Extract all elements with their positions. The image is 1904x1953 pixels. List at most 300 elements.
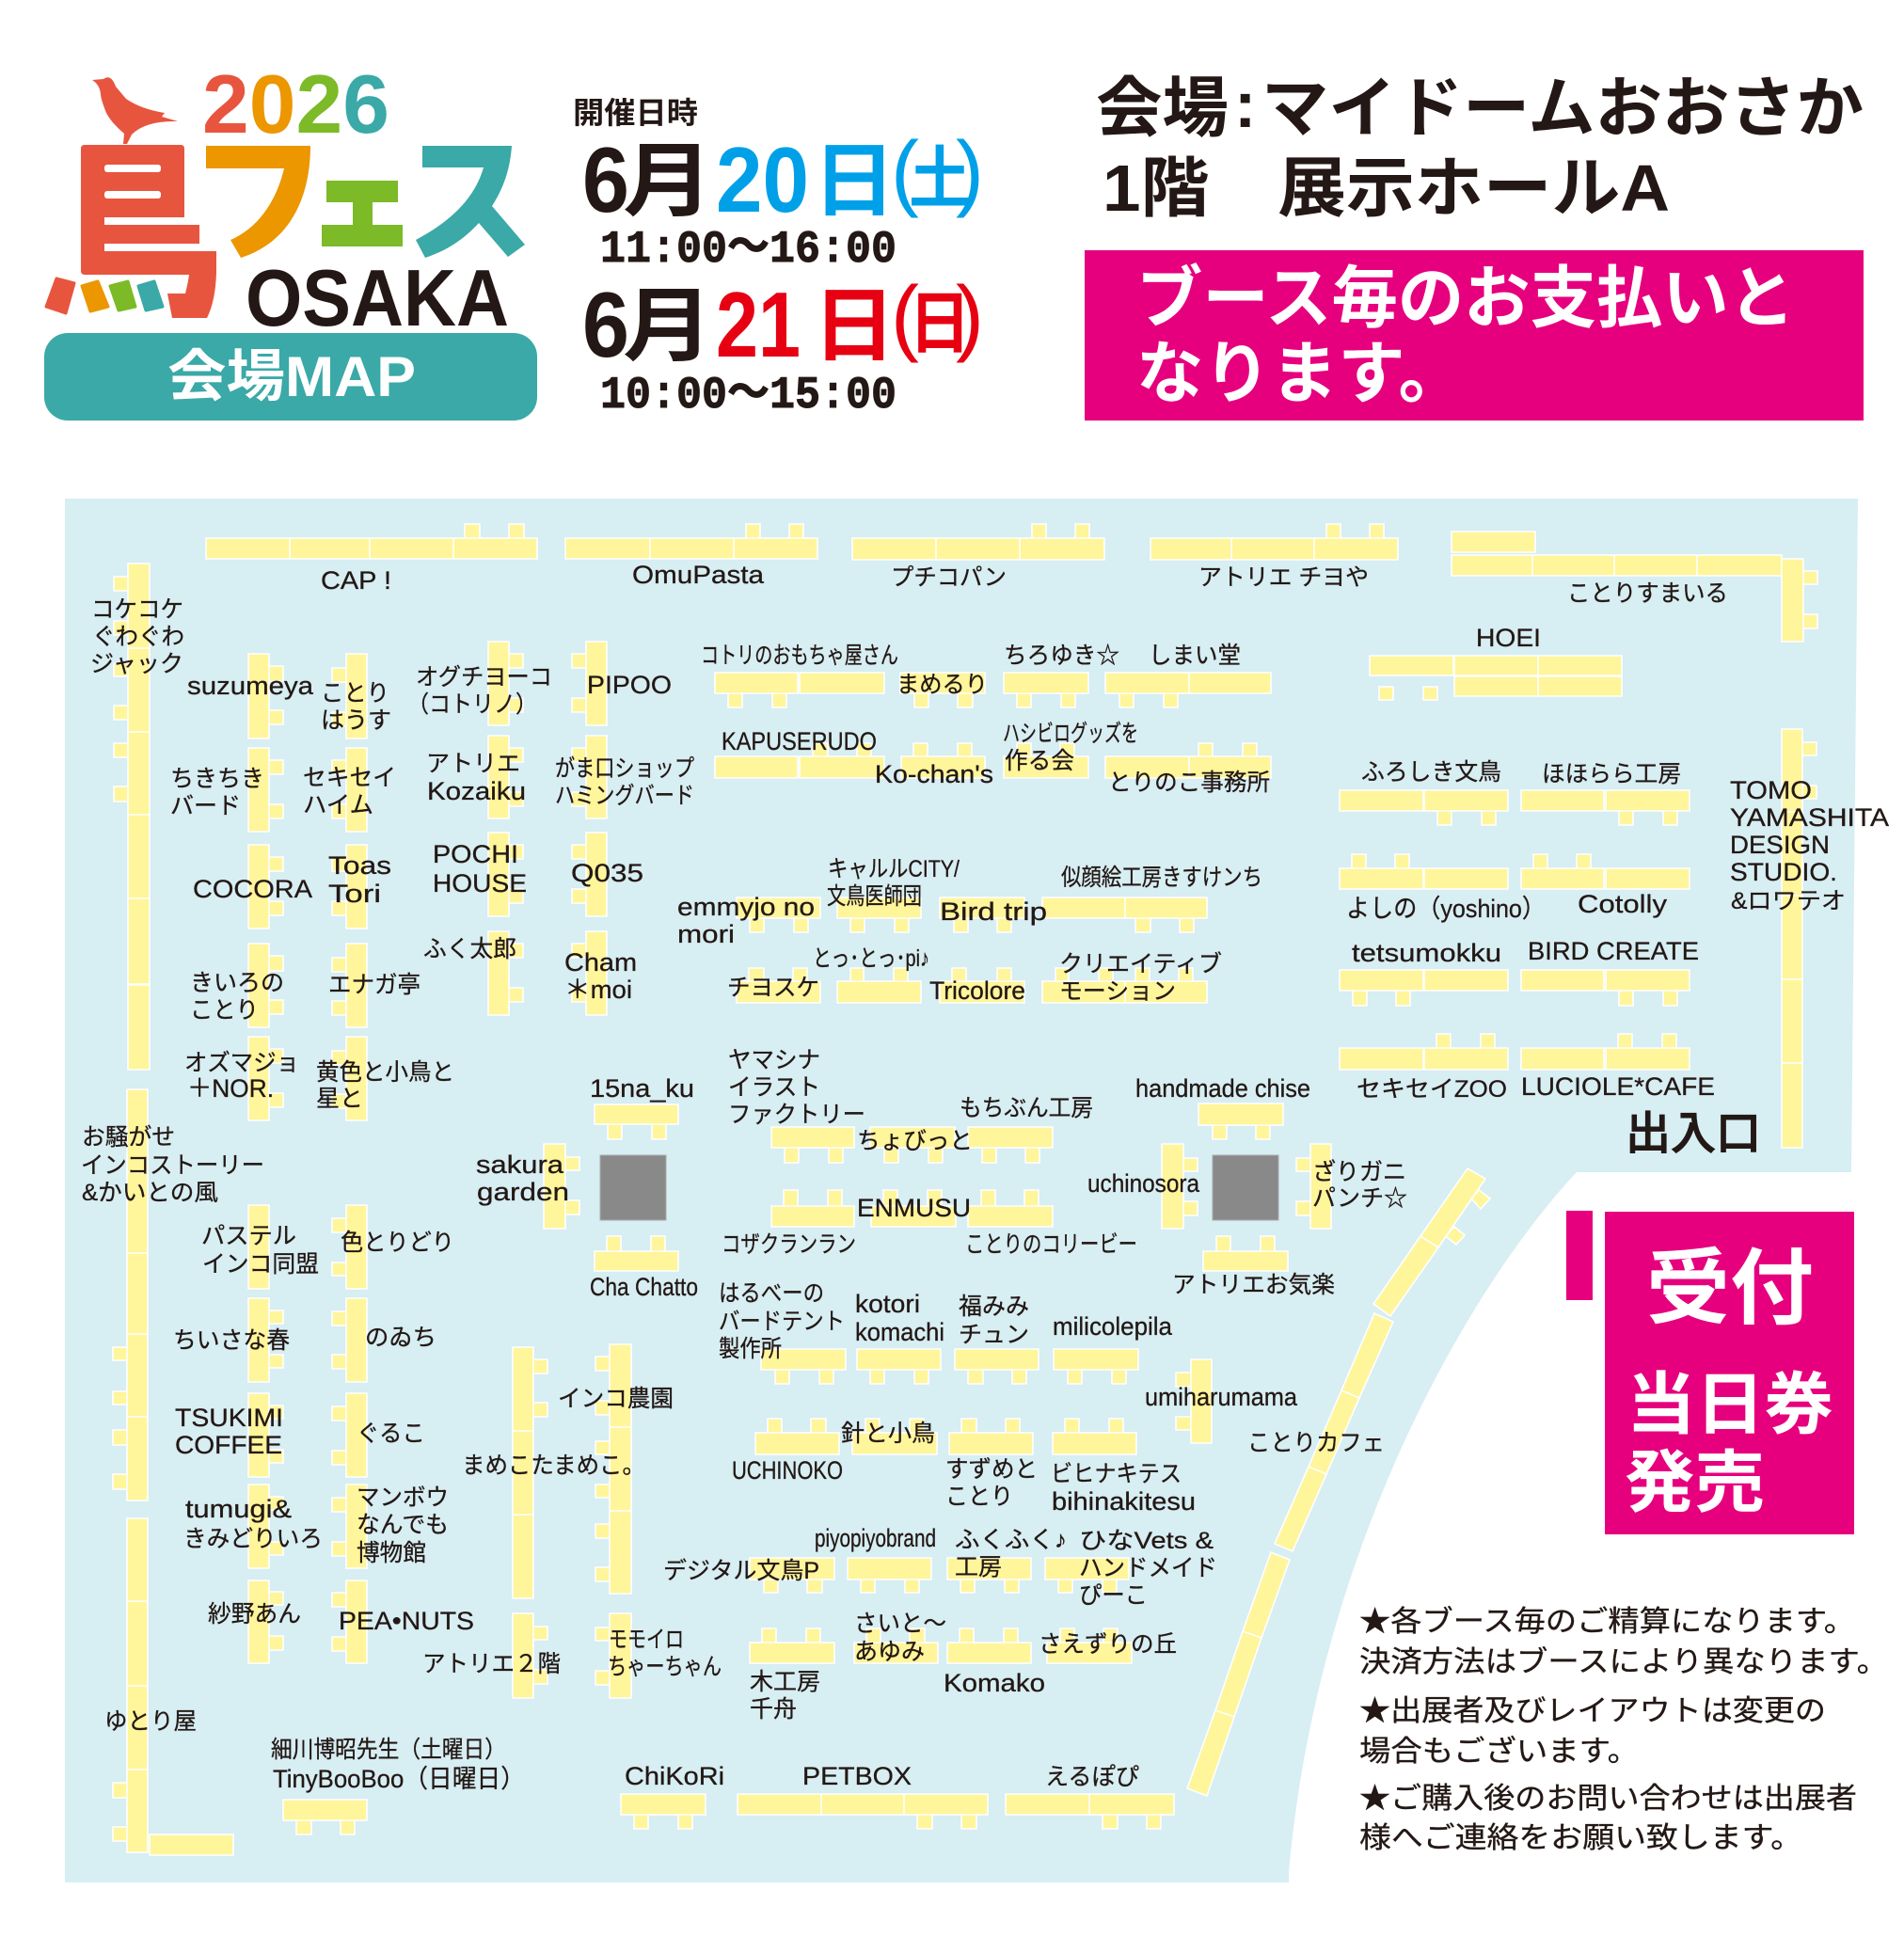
booth: クリエイティブモーション (1042, 968, 1207, 1003)
label: はるべーのバードテント製作所: はるべーの (719, 1280, 824, 1307)
label: オグチヨーコ(コトリノ): （コトリノ） (407, 691, 537, 718)
label: オズマジョ+NOR.: オズマジョ (184, 1050, 299, 1076)
label: handmade chise: handmade chise (1135, 1074, 1310, 1103)
label: コトリのおもちゃ屋さん: コトリのおもちゃ屋さん (701, 643, 898, 669)
booth: Q035 (572, 833, 607, 916)
label: 福みみチュン: 福みみ (959, 1294, 1029, 1320)
label: 黄色と小鳥と星と (316, 1059, 454, 1112)
label: パステルインコ同盟: パステル (201, 1223, 296, 1249)
booth: ハシビログッズを作る会 (1004, 743, 1088, 778)
booth: Cha Chatto (595, 1236, 678, 1271)
booth: コザクランラン (771, 1190, 854, 1227)
label: アトリエお気楽: アトリエお気楽 (1172, 1272, 1335, 1298)
label: emmyjo no mori: mori (677, 920, 735, 948)
banner: 会場MAP (44, 333, 537, 421)
label: マンボウなんでも博物館 (357, 1485, 449, 1566)
panel: venue floor (65, 499, 1858, 1882)
label: POCHI HOUSE (433, 840, 527, 897)
label: クリエイティブモーション: モーション (1059, 978, 1176, 1005)
label: 15na_ku: 15na_ku (590, 1074, 694, 1103)
date: 6月21日(日): ( (891, 270, 919, 364)
label: Q035: Q035 (571, 859, 643, 887)
booth: 細川博昭先生 (283, 1800, 367, 1834)
booth labels (81, 561, 1889, 1793)
label: 木工房千舟 (750, 1669, 820, 1723)
label: ビヒナキテス bihinakitesu (1051, 1461, 1196, 1516)
label: オグチヨーコ(コトリノ): オグチヨーコ (416, 664, 552, 691)
booth: アトリエ チヨや (1150, 524, 1398, 560)
booth: ことりカフェ diagonal wall (1187, 1168, 1490, 1796)
booth: モモイロちゃーちゃん (595, 1613, 631, 1698)
booth: 15na_ku (595, 1104, 678, 1139)
booth: ことりのコリービー (968, 1190, 1053, 1227)
booth: ぐるこ (332, 1393, 367, 1477)
time: Sunday: 10:00〜15:00 (600, 371, 896, 421)
booth: とりのこ事務所 (1105, 743, 1271, 778)
label: しまい堂: しまい堂 (1149, 643, 1241, 669)
booth: 色とりどり (332, 1205, 367, 1289)
booth: ちきちきバード (248, 748, 283, 832)
booth: Ko-chan's (901, 743, 985, 778)
label: 黄色と小鳥と星と: 黄色と小鳥と (316, 1059, 454, 1086)
booth: LUCIOLE*CAFE (1521, 1034, 1690, 1070)
booth: HOEI (1370, 656, 1622, 700)
label: はるべーのバードテント製作所 (719, 1280, 845, 1362)
label: TOMO YAMASHITA DESIGN STUDIO. &ロワテオ: YAMASHITA (1730, 803, 1889, 832)
label: モモイロちゃーちゃん: モモイロ (609, 1627, 684, 1653)
booth: ChiKoRi (621, 1794, 706, 1829)
label: コケコケ ぐわぐわ ジャック: ぐわぐわ (92, 624, 184, 650)
booth: すずめとことり (949, 1419, 1033, 1454)
venue heading: : (1234, 68, 1256, 141)
booth: 福みみチュン (955, 1349, 1039, 1384)
booth: もちぶん工房 (968, 1127, 1053, 1163)
label: ENMUSU: ENMUSU (857, 1194, 971, 1222)
venue heading (1096, 68, 1864, 225)
label: ふくふく♪工房: 工房 (955, 1554, 1002, 1580)
date: 6月21日(日): 日 (813, 281, 896, 372)
notes text block (1359, 1605, 1888, 1854)
label: piyopiyobrand: piyopiyobrand (815, 1524, 936, 1552)
date: 6月21日(日): 6 (582, 273, 629, 376)
icon: bird (92, 77, 178, 144)
label: milicolepila: milicolepila (1053, 1312, 1173, 1341)
booth: PEA•NUTS (332, 1580, 367, 1663)
label: 細川博昭先生 TinyBooBoo: TinyBooBoo（日曜日） (273, 1765, 525, 1793)
booth: tetsumokku (1340, 970, 1508, 1006)
date: 6月21日(日): 月 (623, 281, 713, 372)
label: キャルルCITY/文鳥医師団 (827, 856, 960, 910)
label: Cotolly: Cotolly (1578, 890, 1668, 918)
label: 木工房千舟: 千舟 (750, 1696, 797, 1723)
booth: BIRD CREATE (1521, 970, 1690, 1006)
label: きいろのことり: ことり (190, 997, 259, 1024)
label: kotori komachi: kotori (855, 1290, 920, 1318)
booth: milicolepila (1054, 1349, 1138, 1384)
label: TOMO YAMASHITA DESIGN STUDIO. &ロワテオ: TOMO (1730, 776, 1812, 804)
label: キャルルCITY/文鳥医師団: 文鳥医師団 (827, 883, 922, 910)
booth: uchinosora (1162, 1144, 1198, 1229)
label: はるべーのバードテント製作所: 製作所 (719, 1336, 782, 1362)
label: セキセイハイム: セキセイ (303, 765, 396, 791)
booth: CAP ! (206, 524, 537, 559)
notes text block: 様へご連絡をお願い致します。 (1359, 1821, 1802, 1854)
label: マンボウなんでも博物館: 博物館 (357, 1540, 426, 1566)
label: コケコケ ぐわぐわ ジャック: コケコケ (91, 596, 183, 623)
booth: ざりガニパンチ☆ (1296, 1144, 1331, 1229)
label: tumugi& きみどりいろ: tumugi& (185, 1495, 292, 1523)
booth: オズマジョ+NOR. (248, 1037, 283, 1120)
label: デジタル文鳥P: デジタル文鳥P (663, 1558, 819, 1584)
booth: チヨスケ (737, 968, 820, 1003)
booth: handmade chise (1198, 1104, 1283, 1139)
label: がま口ショップ ハミングバード: がま口ショップ (555, 755, 694, 782)
label: emmyjo no mori (677, 893, 815, 948)
label: ふくふく♪工房: ふくふく♪ (955, 1527, 1067, 1553)
venue heading: マイドームおおさか (1261, 71, 1864, 145)
label: 細川博昭先生 TinyBooBoo: 細川博昭先生（土曜日） (271, 1737, 506, 1763)
label: tetsumokku: tetsumokku (1352, 939, 1501, 967)
booth: ことりはうす (332, 654, 367, 738)
booth: 針と小鳥 (852, 1419, 937, 1454)
venue heading: 会場 (1096, 71, 1229, 145)
label: コケコケ ぐわぐわ ジャック (90, 596, 184, 677)
booth: POCHI HOUSE (488, 833, 523, 916)
label: ふくふく♪工房 (955, 1527, 1067, 1580)
label: クリエイティブモーション: クリエイティブ (1059, 951, 1222, 977)
booth: コトリのおもちゃ屋さん (715, 673, 884, 707)
label: ちいさな春: ちいさな春 (173, 1327, 290, 1354)
label: tumugi& きみどりいろ: きみどりいろ (183, 1526, 323, 1552)
label: すずめとことり: ことり (945, 1484, 1013, 1510)
booth: 紗野あん (248, 1580, 283, 1663)
label: Toas Tori: Tori (328, 880, 381, 908)
label: 似顔絵工房きすけンち: 似顔絵工房きすけンち (1061, 865, 1262, 891)
label: HOEI: HOEI (1476, 624, 1541, 652)
label: sakura garden: sakura (476, 1151, 564, 1179)
booth: suzumeya (248, 654, 283, 738)
label: ヤマシナイラストファクトリー: ヤマシナ (728, 1047, 820, 1073)
label: Cham ＊moi (564, 948, 637, 1004)
booth: sakura garden (544, 1144, 579, 1229)
date: 6月20日(土): 月 (623, 136, 713, 227)
label: セキセイハイム: ハイム (303, 792, 373, 818)
label: お騒がせインコストーリー&かいとの風: &かいとの風 (82, 1180, 218, 1206)
label: CAP !: CAP ! (321, 566, 391, 595)
label: TSUKIMI COFFEE: TSUKIMI (175, 1404, 283, 1432)
label: アトリエ2階: アトリエ２階 (422, 1651, 561, 1677)
booth: まめこたまめこ。 (513, 1347, 547, 1598)
notes text block: ★出展者及びレイアウトは変更の (1359, 1694, 1826, 1727)
booth: TSUKIMI COFFEE (248, 1393, 283, 1477)
label: PIPOO: PIPOO (587, 671, 672, 699)
label: ことりはうす: はうす (321, 707, 391, 734)
label: Cham ＊moi: Cham (564, 948, 637, 976)
booth: ENMUSU (871, 1190, 956, 1227)
label: まめるり: まめるり (896, 672, 988, 698)
booth: インコ農園 (595, 1344, 631, 1594)
booth: PETBOX (738, 1794, 988, 1829)
booth: マンボウなんでも博物館 (332, 1485, 367, 1568)
label: BIRD CREATE: BIRD CREATE (1528, 937, 1699, 965)
booth: 黄色と小鳥と星と (332, 1037, 367, 1120)
label: きいろのことり (190, 970, 284, 1024)
label: COCORA: COCORA (193, 875, 312, 903)
label: TOMO YAMASHITA DESIGN STUDIO. &ロワテオ: DESIGN (1730, 831, 1830, 859)
booth: Cotolly (1521, 854, 1690, 889)
label: 黄色と小鳥と星と: 星と (316, 1086, 363, 1112)
label: アトリエKozaiku: Kozaiku (427, 777, 526, 805)
label: きいろのことり: きいろの (190, 970, 284, 996)
label: ヤマシナイラストファクトリー: ファクトリー (728, 1102, 865, 1128)
label: sakura garden (476, 1151, 569, 1206)
booth: OmuPasta (565, 524, 817, 559)
label: ひなVets&ハンドメイドぴーこ (1079, 1528, 1217, 1609)
logo: 鳥フェス OSAKA 2026 (44, 57, 537, 421)
label: マンボウなんでも博物館: マンボウ (357, 1485, 449, 1511)
label: お騒がせインコストーリー&かいとの風: お騒がせ (82, 1124, 175, 1151)
label: ひなVets&ハンドメイドぴーこ: ひなVets & (1079, 1528, 1214, 1554)
label: KAPUSERUDO: KAPUSERUDO (722, 727, 877, 755)
payment notice panel (1085, 250, 1864, 421)
label: ビヒナキテス bihinakitesu: bihinakitesu (1052, 1487, 1196, 1516)
label: tumugi& きみどりいろ (183, 1495, 323, 1552)
label: ことりはうす: ことり (321, 680, 389, 707)
date: 6月20日(土): 6 (582, 128, 629, 231)
label: まめこたまめこ。: まめこたまめこ。 (462, 1453, 645, 1479)
booth: さいと〜あゆみ (854, 1628, 938, 1663)
label: Bird trip: Bird trip (940, 897, 1047, 926)
booth: よしの(yoshino) (1340, 854, 1508, 889)
booth: とっ・とっ・pi♪ (837, 968, 921, 1003)
booth: Komako (947, 1628, 1031, 1663)
label: ちきちきバード: ちきちき (170, 766, 264, 792)
booth: tumugi&きみどりいろ (248, 1485, 283, 1568)
payment notice panel: ブース毎のお支払いと (1136, 262, 1795, 337)
logo glyph: ス (416, 146, 525, 258)
label: エナガ亭: エナガ亭 (328, 972, 420, 998)
booth: COCORA (248, 845, 283, 929)
booth: オグチヨーコ (488, 642, 523, 725)
booth: ヤマシナイラストファクトリー (771, 1127, 854, 1163)
label: もちぶん工房: もちぶん工房 (960, 1095, 1093, 1121)
booth: Bird trip (940, 897, 1024, 932)
date: 6月20日(土): 土 (909, 142, 971, 217)
booth: アトリエKozaiku (488, 736, 523, 818)
booth: ちいさな春 (248, 1298, 283, 1382)
date: 6月21日(日) (582, 270, 984, 376)
label: ことりのコリービー: ことりのコリービー (965, 1231, 1137, 1258)
booth: umiharumama (1176, 1359, 1212, 1443)
label: 針と小鳥: 針と小鳥 (841, 1421, 935, 1447)
booth: KAPUSERUDO (715, 743, 884, 778)
label: suzumeya: suzumeya (187, 672, 314, 700)
label: セキセイZOO: セキセイZOO (1357, 1076, 1507, 1103)
label: オグチヨーコ(コトリノ) (407, 664, 552, 718)
label: はるべーのバードテント製作所: バードテント (719, 1309, 845, 1335)
label: とっ・とっ・pi♪: とっ･とっ･pi♪ (813, 945, 929, 972)
date: 6月20日(土): 日 (813, 136, 896, 227)
notes text block: 場合もございます。 (1359, 1735, 1639, 1768)
label: さいと〜あゆみ: さいと〜 (854, 1611, 946, 1637)
label: ふろしき文鳥: ふろしき文鳥 (1361, 759, 1501, 786)
notes text block: ★ご購入後のお問い合わせは出展者 (1359, 1782, 1857, 1815)
label: 出入口: 出入口 (1626, 1109, 1761, 1159)
logo text OSAKA: OSAKA (246, 254, 509, 343)
label: ヤマシナイラストファクトリー (728, 1047, 865, 1128)
date: 6月21日(日): 21 (716, 273, 801, 376)
venue heading: 1階 展示ホールA (1103, 151, 1670, 225)
label: ざりガニパンチ☆: ざりガニ (1312, 1158, 1406, 1185)
label: ことりカフェ: ことりカフェ (1247, 1430, 1385, 1456)
booth tables (113, 524, 1817, 1855)
booth: アトリエ2階 (513, 1613, 547, 1698)
booth: プチコパン (852, 524, 1104, 560)
label: TOMO YAMASHITA DESIGN STUDIO. &ロワテオ (1730, 776, 1889, 914)
booth: ビヒナキテス (1053, 1419, 1136, 1454)
label: UCHINOKO: UCHINOKO (732, 1456, 843, 1485)
booth: がま口ショップ (572, 736, 607, 818)
booth: ふくふく♪工房 (947, 1558, 1031, 1593)
booth: Cham *moi (572, 931, 607, 1015)
panel: reception and same-day tickets (1605, 1212, 1854, 1534)
label: Tricolore: Tricolore (929, 976, 1025, 1005)
label: アトリエ チヨや: アトリエ チヨや (1198, 564, 1369, 591)
label: セキセイハイム (303, 765, 396, 818)
label: 福みみチュン: チュン (959, 1322, 1029, 1348)
label: Cham ＊moi: ＊moi (564, 976, 632, 1004)
booth: セキセイZOO (1340, 1034, 1508, 1070)
date: 6月21日(日): 日 (909, 287, 971, 362)
booth: PIPOO (572, 642, 607, 725)
label: さいと〜あゆみ (854, 1611, 946, 1665)
logo year 2026: 2026 (202, 57, 389, 151)
label: マンボウなんでも博物館: なんでも (357, 1512, 449, 1538)
booth: ひなVets&ハンドメイドぴーこ (1045, 1558, 1129, 1593)
booth: デジタル文鳥P (750, 1558, 834, 1593)
booth: TOMO YAMASHITA DESIGN STUDIO. (1782, 729, 1817, 1148)
booth: コケコケ ぐわぐわ ジャック (114, 564, 150, 1070)
label: がま口ショップ ハミングバード (555, 755, 694, 809)
booth: Tricolore (940, 968, 1024, 1003)
label: LUCIOLE*CAFE: LUCIOLE*CAFE (1521, 1072, 1715, 1101)
label: パステルインコ同盟 (201, 1223, 319, 1278)
label: TOMO YAMASHITA DESIGN STUDIO. &ロワテオ: &ロワテオ (1731, 888, 1846, 914)
time: Saturday: 11:00〜16:00 (600, 225, 896, 276)
label: Komako: Komako (944, 1669, 1045, 1697)
label: TOMO YAMASHITA DESIGN STUDIO. &ロワテオ: STUDIO. (1730, 858, 1837, 886)
notes text block: 決済方法はブースにより異なります。 (1359, 1645, 1888, 1678)
label: クリエイティブモーション (1059, 951, 1222, 1005)
booth: UCHINOKO (755, 1419, 839, 1454)
label: お騒がせインコストーリー&かいとの風 (81, 1124, 264, 1206)
label: Ko-chan's: Ko-chan's (875, 760, 993, 788)
label: TSUKIMI COFFEE: COFFEE (175, 1431, 282, 1459)
date: 6月20日(土): ) (956, 125, 984, 219)
label: kotori komachi (855, 1290, 944, 1346)
label: さえずりの丘: さえずりの丘 (1039, 1631, 1177, 1658)
label: ことりはうす (321, 680, 391, 734)
label: ChiKoRi: ChiKoRi (625, 1762, 724, 1790)
notes text block: ★各ブース毎のご精算になります。 (1359, 1605, 1855, 1638)
label: お騒がせインコストーリー&かいとの風: インコストーリー (81, 1152, 264, 1179)
logo glyph: フ (206, 146, 310, 258)
label: uchinosora: uchinosora (1087, 1169, 1200, 1198)
label: ハシビログッズを作る会 (1003, 721, 1138, 774)
booth: のゐち (332, 1298, 367, 1382)
booth: ことりすまいる (1452, 532, 1817, 642)
label: PETBOX: PETBOX (802, 1762, 912, 1790)
label: 木工房千舟: 木工房 (750, 1669, 820, 1695)
label: ほほらら工房: ほほらら工房 (1542, 761, 1681, 787)
label: すずめとことり (945, 1456, 1038, 1510)
label: OmuPasta: OmuPasta (632, 561, 765, 589)
label: ビヒナキテス bihinakitesu: ビヒナキテス (1051, 1461, 1182, 1487)
label: emmyjo no mori: emmyjo no (677, 893, 815, 921)
label: プチコパン: プチコパン (891, 564, 1007, 591)
booth: きいろのことり (248, 944, 283, 1027)
label: 紗野あん: 紗野あん (208, 1601, 301, 1628)
booth: しまい堂 (1105, 673, 1271, 707)
label: Toas Tori: Toas (328, 851, 391, 880)
label: よしの(yoshino): よしの（yoshino） (1346, 895, 1546, 923)
booth: kotori komachi (857, 1349, 941, 1384)
logo glyph: 鳥 (46, 145, 216, 318)
booth: アトリエお気楽 (1203, 1236, 1288, 1271)
label: ちろゆき☆: ちろゆき☆ (1004, 643, 1119, 669)
label: PEA•NUTS: PEA•NUTS (339, 1607, 474, 1635)
label: ヤマシナイラストファクトリー: イラスト (728, 1074, 820, 1101)
label: のゐち: のゐち (365, 1325, 436, 1351)
date: 6月20日(土): 20 (716, 128, 809, 231)
label: Toas Tori (328, 851, 391, 908)
booth: 木工房千舟 (750, 1628, 834, 1663)
label: モモイロちゃーちゃん: ちゃーちゃん (608, 1654, 722, 1680)
reception marker (1566, 1211, 1593, 1300)
panel: reception and same-day tickets: 当日券 (1626, 1368, 1833, 1443)
label: さいと〜あゆみ: あゆみ (854, 1639, 925, 1665)
label: モモイロちゃーちゃん (608, 1627, 722, 1680)
label: ざりガニパンチ☆ (1312, 1158, 1407, 1212)
booth: まめるり (900, 673, 985, 707)
label: 福みみチュン (959, 1294, 1029, 1348)
label: とりのこ事務所: とりのこ事務所 (1108, 770, 1270, 796)
booth: エナガ亭 (332, 944, 367, 1027)
date: 6月20日(土): ( (891, 125, 919, 219)
date: 6月21日(日): ) (956, 270, 984, 364)
panel: reception and same-day tickets: 発売 (1625, 1446, 1765, 1521)
booth: はるべーのバードテント製作所 (761, 1349, 846, 1384)
label: ハシビログッズを作る会: 作る会 (1005, 748, 1074, 774)
label: ちきちきバード (170, 766, 264, 819)
label: ひなVets&ハンドメイドぴーこ: ハンドメイド (1079, 1555, 1217, 1581)
label: POCHI HOUSE: POCHI (433, 840, 518, 868)
label: すずめとことり: すずめと (945, 1456, 1038, 1483)
booth: ふろしき文鳥 (1340, 790, 1508, 825)
booth: キャルルCITY/文鳥医師団 (837, 897, 921, 932)
banner: 会場MAP: 会場MAP (167, 345, 416, 408)
label: オズマジョ+NOR. (184, 1050, 299, 1103)
label: チヨスケ: チヨスケ (727, 975, 819, 1001)
event dates (573, 96, 984, 421)
label: kotori komachi: komachi (855, 1318, 944, 1346)
label: ぐるこ: ぐるこ (357, 1421, 425, 1447)
label: Cha Chatto: Cha Chatto (590, 1273, 698, 1301)
label: ハシビログッズを作る会: ハシビログッズを (1003, 721, 1138, 747)
label: ふく太郎: ふく太郎 (423, 936, 516, 962)
label: ちょびっと: ちょびっと (857, 1128, 973, 1154)
label: コケコケ ぐわぐわ ジャック: ジャック (90, 651, 183, 677)
